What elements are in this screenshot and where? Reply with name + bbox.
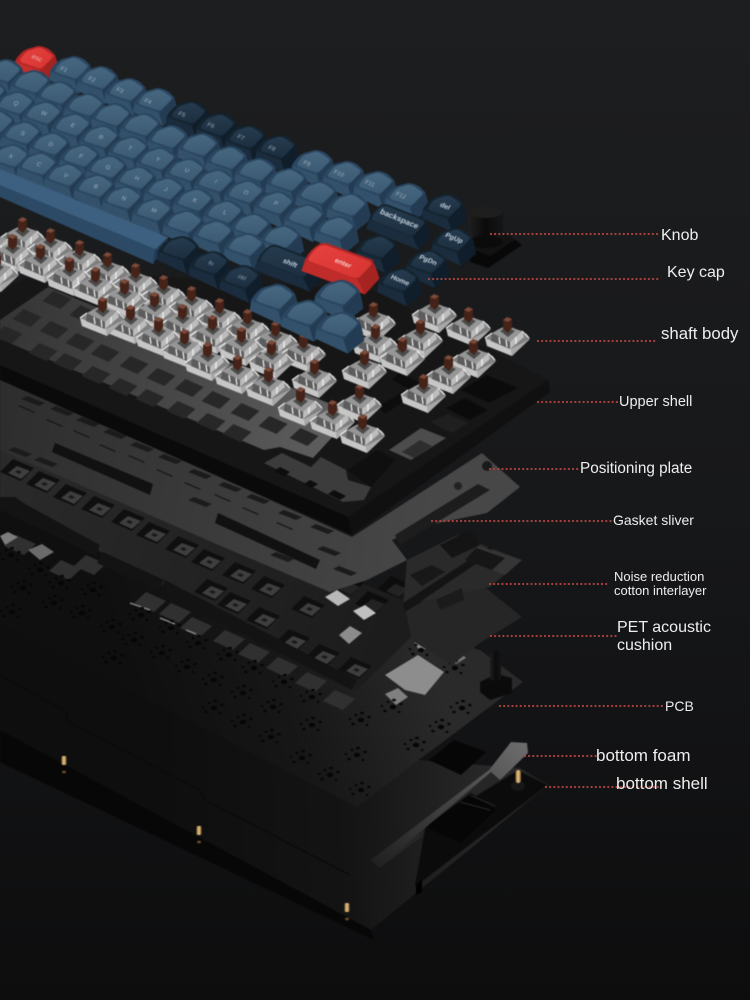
key legends: I xyxy=(213,179,218,185)
key legends: F8 xyxy=(267,145,277,153)
arrow keys xyxy=(250,280,364,354)
label: Upper shell: Upper shell xyxy=(619,394,692,410)
key legends: F1 xyxy=(59,66,69,74)
key legends: F6 xyxy=(206,122,216,130)
key legends: F7 xyxy=(236,134,245,142)
key legends: Q xyxy=(12,101,20,108)
key legends: F4 xyxy=(143,98,153,106)
PET acoustic cushion xyxy=(404,575,522,665)
bottom foam bar xyxy=(371,742,528,867)
space bar xyxy=(0,170,170,263)
key legends: U xyxy=(183,168,190,175)
key legends: B xyxy=(92,184,99,190)
gasket bars xyxy=(52,443,320,569)
key legends: F9 xyxy=(302,160,312,168)
home row xyxy=(0,110,422,306)
highlighted components xyxy=(0,532,466,710)
key legends: J xyxy=(163,187,168,193)
label: PCB: PCB xyxy=(665,698,694,714)
label: bottom shell: bottom shell xyxy=(616,774,708,793)
switches xyxy=(0,217,530,453)
label: bottom foam: bottom foam xyxy=(596,746,690,765)
key legends: esc xyxy=(30,54,44,64)
key legends: ctrl xyxy=(236,274,247,282)
frame windows xyxy=(0,459,412,679)
key legends: F12 xyxy=(394,192,407,201)
key legends: del xyxy=(438,202,451,212)
key legends: F11 xyxy=(363,180,376,189)
bottom row xyxy=(157,236,379,303)
label: Knob: Knob xyxy=(661,227,698,244)
function row xyxy=(0,46,467,232)
encoder post xyxy=(480,651,512,700)
label: Gasket sliver: Gasket sliver xyxy=(613,512,694,528)
noise reduction cotton layer xyxy=(0,440,412,690)
key legends: fn xyxy=(207,261,214,268)
key legends: PgDn xyxy=(418,254,438,267)
key legends: Home xyxy=(389,274,411,287)
key legends: F xyxy=(77,154,84,161)
key legends: enter xyxy=(333,257,353,270)
label: Noise reduction cotton interlayer: cotton interlayer xyxy=(614,583,707,598)
key legends xyxy=(7,54,464,287)
key legends: F2 xyxy=(87,76,96,84)
callout leader lines xyxy=(429,234,663,787)
key legends: L xyxy=(221,210,228,217)
right end of noise reduction cotton layer xyxy=(403,530,522,612)
PCB layer xyxy=(0,480,523,807)
label: shaft body: shaft body xyxy=(661,324,739,343)
QWERTY row xyxy=(0,80,450,288)
label: Key cap: Key cap xyxy=(667,264,725,281)
upper shell xyxy=(0,270,550,535)
label: PET acoustic cushion: cushion xyxy=(617,637,672,654)
solder hole clusters xyxy=(0,547,472,796)
label: PET acoustic cushion: PET acoustic xyxy=(617,619,711,636)
black gasket bars xyxy=(0,497,357,690)
key legends: shift xyxy=(281,258,299,270)
key legends: F10 xyxy=(332,170,345,179)
lower letter row xyxy=(0,144,268,271)
keycaps xyxy=(0,46,476,354)
key legends: G xyxy=(104,165,112,172)
key legends: backspace xyxy=(378,207,421,231)
knob xyxy=(468,206,522,268)
key legends: W xyxy=(39,110,48,118)
key legends: X xyxy=(7,154,14,160)
shell cutouts xyxy=(378,372,518,460)
key legends: F5 xyxy=(177,111,187,119)
key legends: F3 xyxy=(115,87,125,95)
dark strip between foam and PCB xyxy=(429,740,486,775)
label: Positioning plate: Positioning plate xyxy=(580,460,692,477)
key legends: Y xyxy=(154,157,161,163)
number row xyxy=(0,59,476,266)
label: Noise reduction cotton interlayer: Noise reduction xyxy=(614,569,704,584)
positioning plate and gasket sliver xyxy=(0,378,520,592)
key legends: C xyxy=(35,162,43,169)
key legends: S xyxy=(19,131,26,137)
key legends: PgUp xyxy=(444,232,464,245)
plate slots xyxy=(8,396,357,576)
key legends: H xyxy=(133,176,140,183)
key legends: D xyxy=(47,142,54,149)
plate key holes xyxy=(0,291,318,446)
key legends: E xyxy=(69,123,76,129)
key legends: V xyxy=(62,173,69,179)
key legends: K xyxy=(191,198,198,204)
bottom shell layer xyxy=(0,620,548,940)
key legends: P xyxy=(272,201,279,207)
key legends: M xyxy=(150,208,157,215)
switch plate with holes xyxy=(0,287,395,502)
key legends: O xyxy=(242,190,250,197)
exploded keyboard illustration xyxy=(0,46,550,940)
key legends: R xyxy=(97,135,105,142)
key legends: T xyxy=(126,146,133,153)
key legends: N xyxy=(120,196,127,203)
gold pins xyxy=(62,756,521,920)
